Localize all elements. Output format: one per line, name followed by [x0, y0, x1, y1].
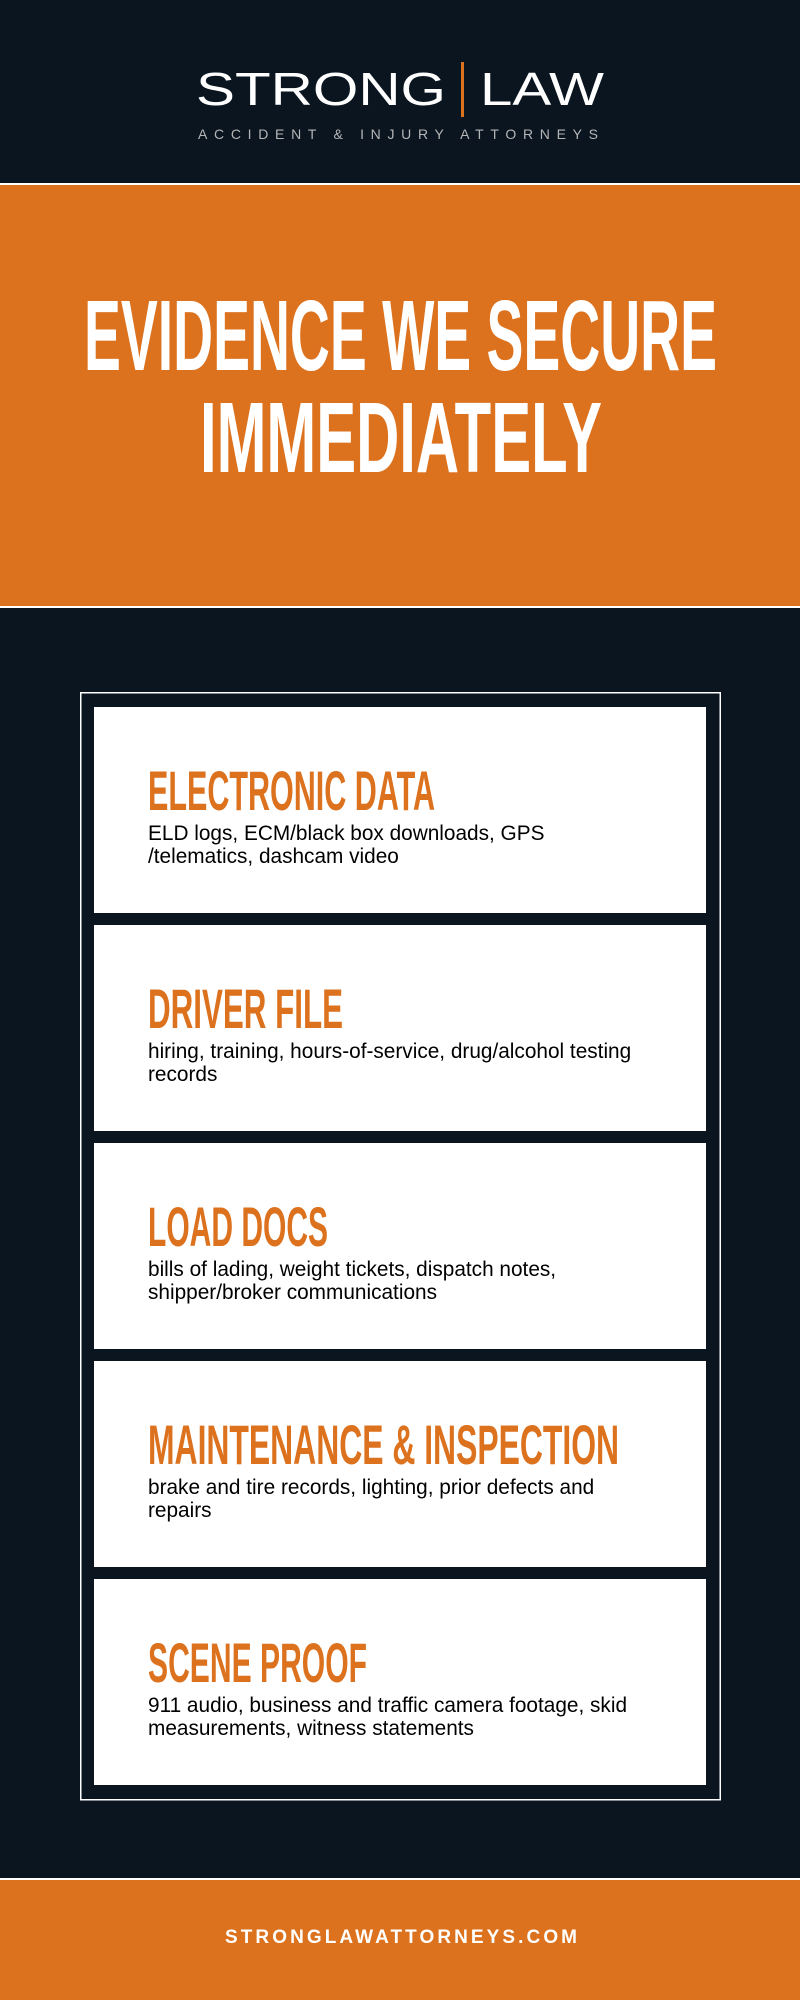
card: maintenance & inspection: brake and tire records, lighting, prior defects and	[148, 1476, 594, 1499]
card: driver file: records	[148, 1063, 217, 1086]
card: scene proof: 911 audio, business and traffic camera footage, skid	[148, 1694, 627, 1717]
card: electronic data: ELECTRONIC DATA	[148, 759, 435, 822]
card: maintenance & inspection: repairs	[148, 1499, 212, 1522]
footer: STRONGLAWATTORNEYS.COM	[225, 1927, 577, 1948]
logo: LAW	[480, 63, 605, 115]
card: electronic data: ELD logs, ECM/black box downloads, GPS	[148, 822, 544, 845]
card: driver file: hiring, training, hours-of-service, drug/alcohol testing	[148, 1040, 631, 1063]
logo: ACCIDENT & INJURY ATTORNEYS	[198, 126, 598, 142]
evidence list panel	[81, 693, 720, 1800]
card: electronic data	[94, 707, 706, 913]
card: load docs: LOAD DOCS	[148, 1195, 328, 1258]
card: scene proof	[94, 1579, 706, 1785]
card: scene proof: measurements, witness statements	[148, 1717, 474, 1740]
logo: STRONG	[196, 63, 446, 115]
card: load docs: shipper/broker communications	[148, 1281, 437, 1304]
card: electronic data: /telematics, dashcam video	[148, 845, 399, 868]
title	[84, 280, 717, 494]
card: load docs	[94, 1143, 706, 1349]
card: maintenance & inspection	[94, 1361, 706, 1567]
logo	[196, 62, 605, 142]
card: load docs: bills of lading, weight tickets, dispatch notes,	[148, 1258, 556, 1281]
card: driver file	[94, 925, 706, 1131]
title banner	[0, 183, 800, 608]
card: driver file: DRIVER FILE	[148, 977, 343, 1040]
footer	[0, 1878, 800, 2000]
card: scene proof: SCENE PROOF	[148, 1631, 367, 1694]
